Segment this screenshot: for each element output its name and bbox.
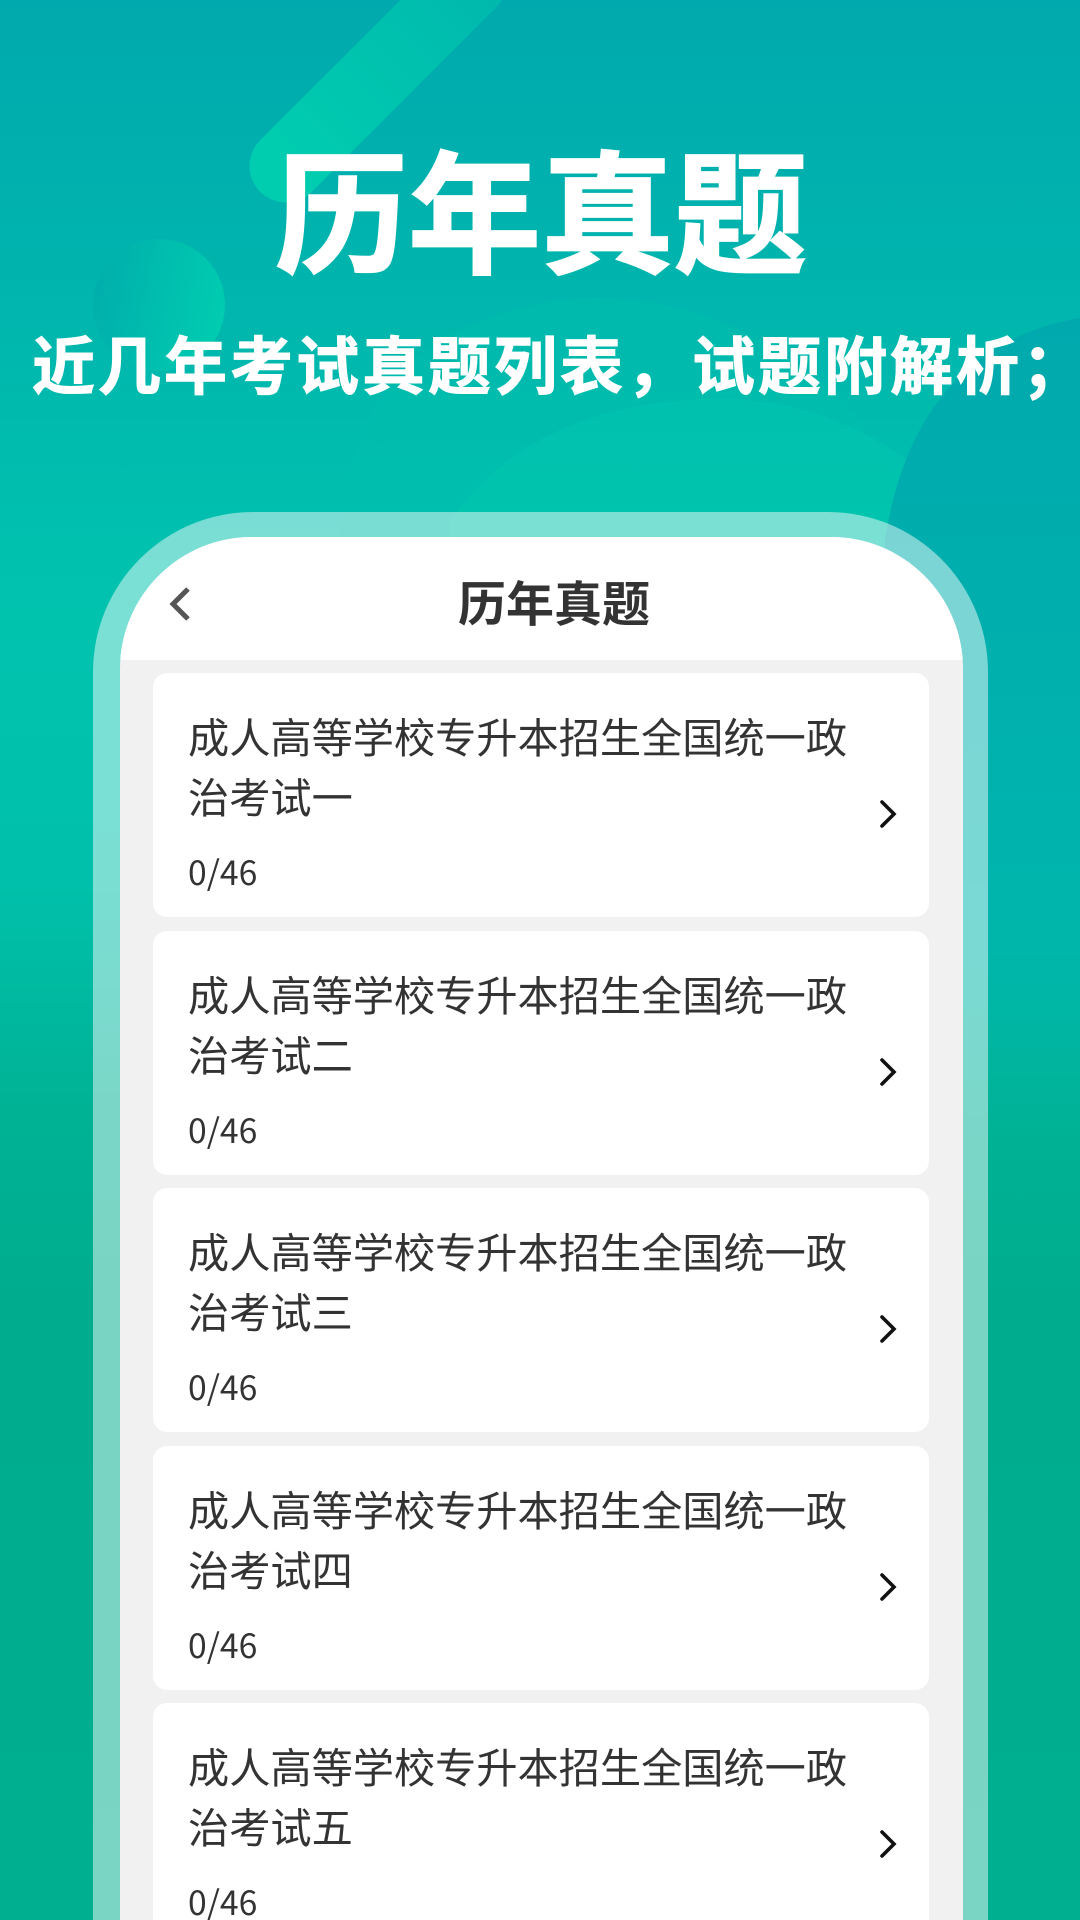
phone screen — [120, 537, 963, 1920]
chevron — [880, 800, 896, 828]
header title: 历年真题 — [458, 565, 650, 635]
exam card 2: 治考试二 — [188, 1022, 353, 1082]
exam card 3: 成人高等学校专升本招生全国统一政 — [188, 1220, 847, 1280]
app header — [120, 537, 963, 660]
exam card 4 — [153, 1446, 929, 1690]
chevron — [880, 1058, 896, 1086]
exam card 3: 0/46 — [188, 1361, 257, 1410]
exam card 5 — [153, 1703, 929, 1920]
exam card 4: 治考试四 — [188, 1538, 353, 1598]
exam card 1: 0/46 — [188, 846, 257, 895]
exam card 5: 治考试五 — [188, 1795, 353, 1855]
exam card 1: 成人高等学校专升本招生全国统一政 — [188, 705, 847, 765]
chevron — [880, 1315, 896, 1343]
exam card 3: 治考试三 — [188, 1280, 353, 1340]
exam card 2: 成人高等学校专升本招生全国统一政 — [188, 962, 847, 1022]
exam card 4: 0/46 — [188, 1618, 257, 1668]
exam card 2: 0/46 — [188, 1104, 257, 1152]
exam card 2 — [153, 930, 929, 1174]
exam card 3 — [153, 1188, 929, 1432]
exam card 4: 成人高等学校专升本招生全国统一政 — [188, 1478, 847, 1538]
subtitle: 近几年考试真题列表，试题附解析； — [32, 317, 1080, 408]
exam card 1 — [153, 673, 929, 917]
back arrow — [170, 587, 190, 621]
exam card 5: 成人高等学校专升本招生全国统一政 — [188, 1735, 847, 1795]
phone frame — [93, 512, 988, 1920]
chevron — [880, 1830, 896, 1858]
chevron — [880, 1573, 896, 1601]
title: 历年真题 — [275, 110, 807, 302]
exam card 1: 治考试一 — [188, 765, 353, 825]
